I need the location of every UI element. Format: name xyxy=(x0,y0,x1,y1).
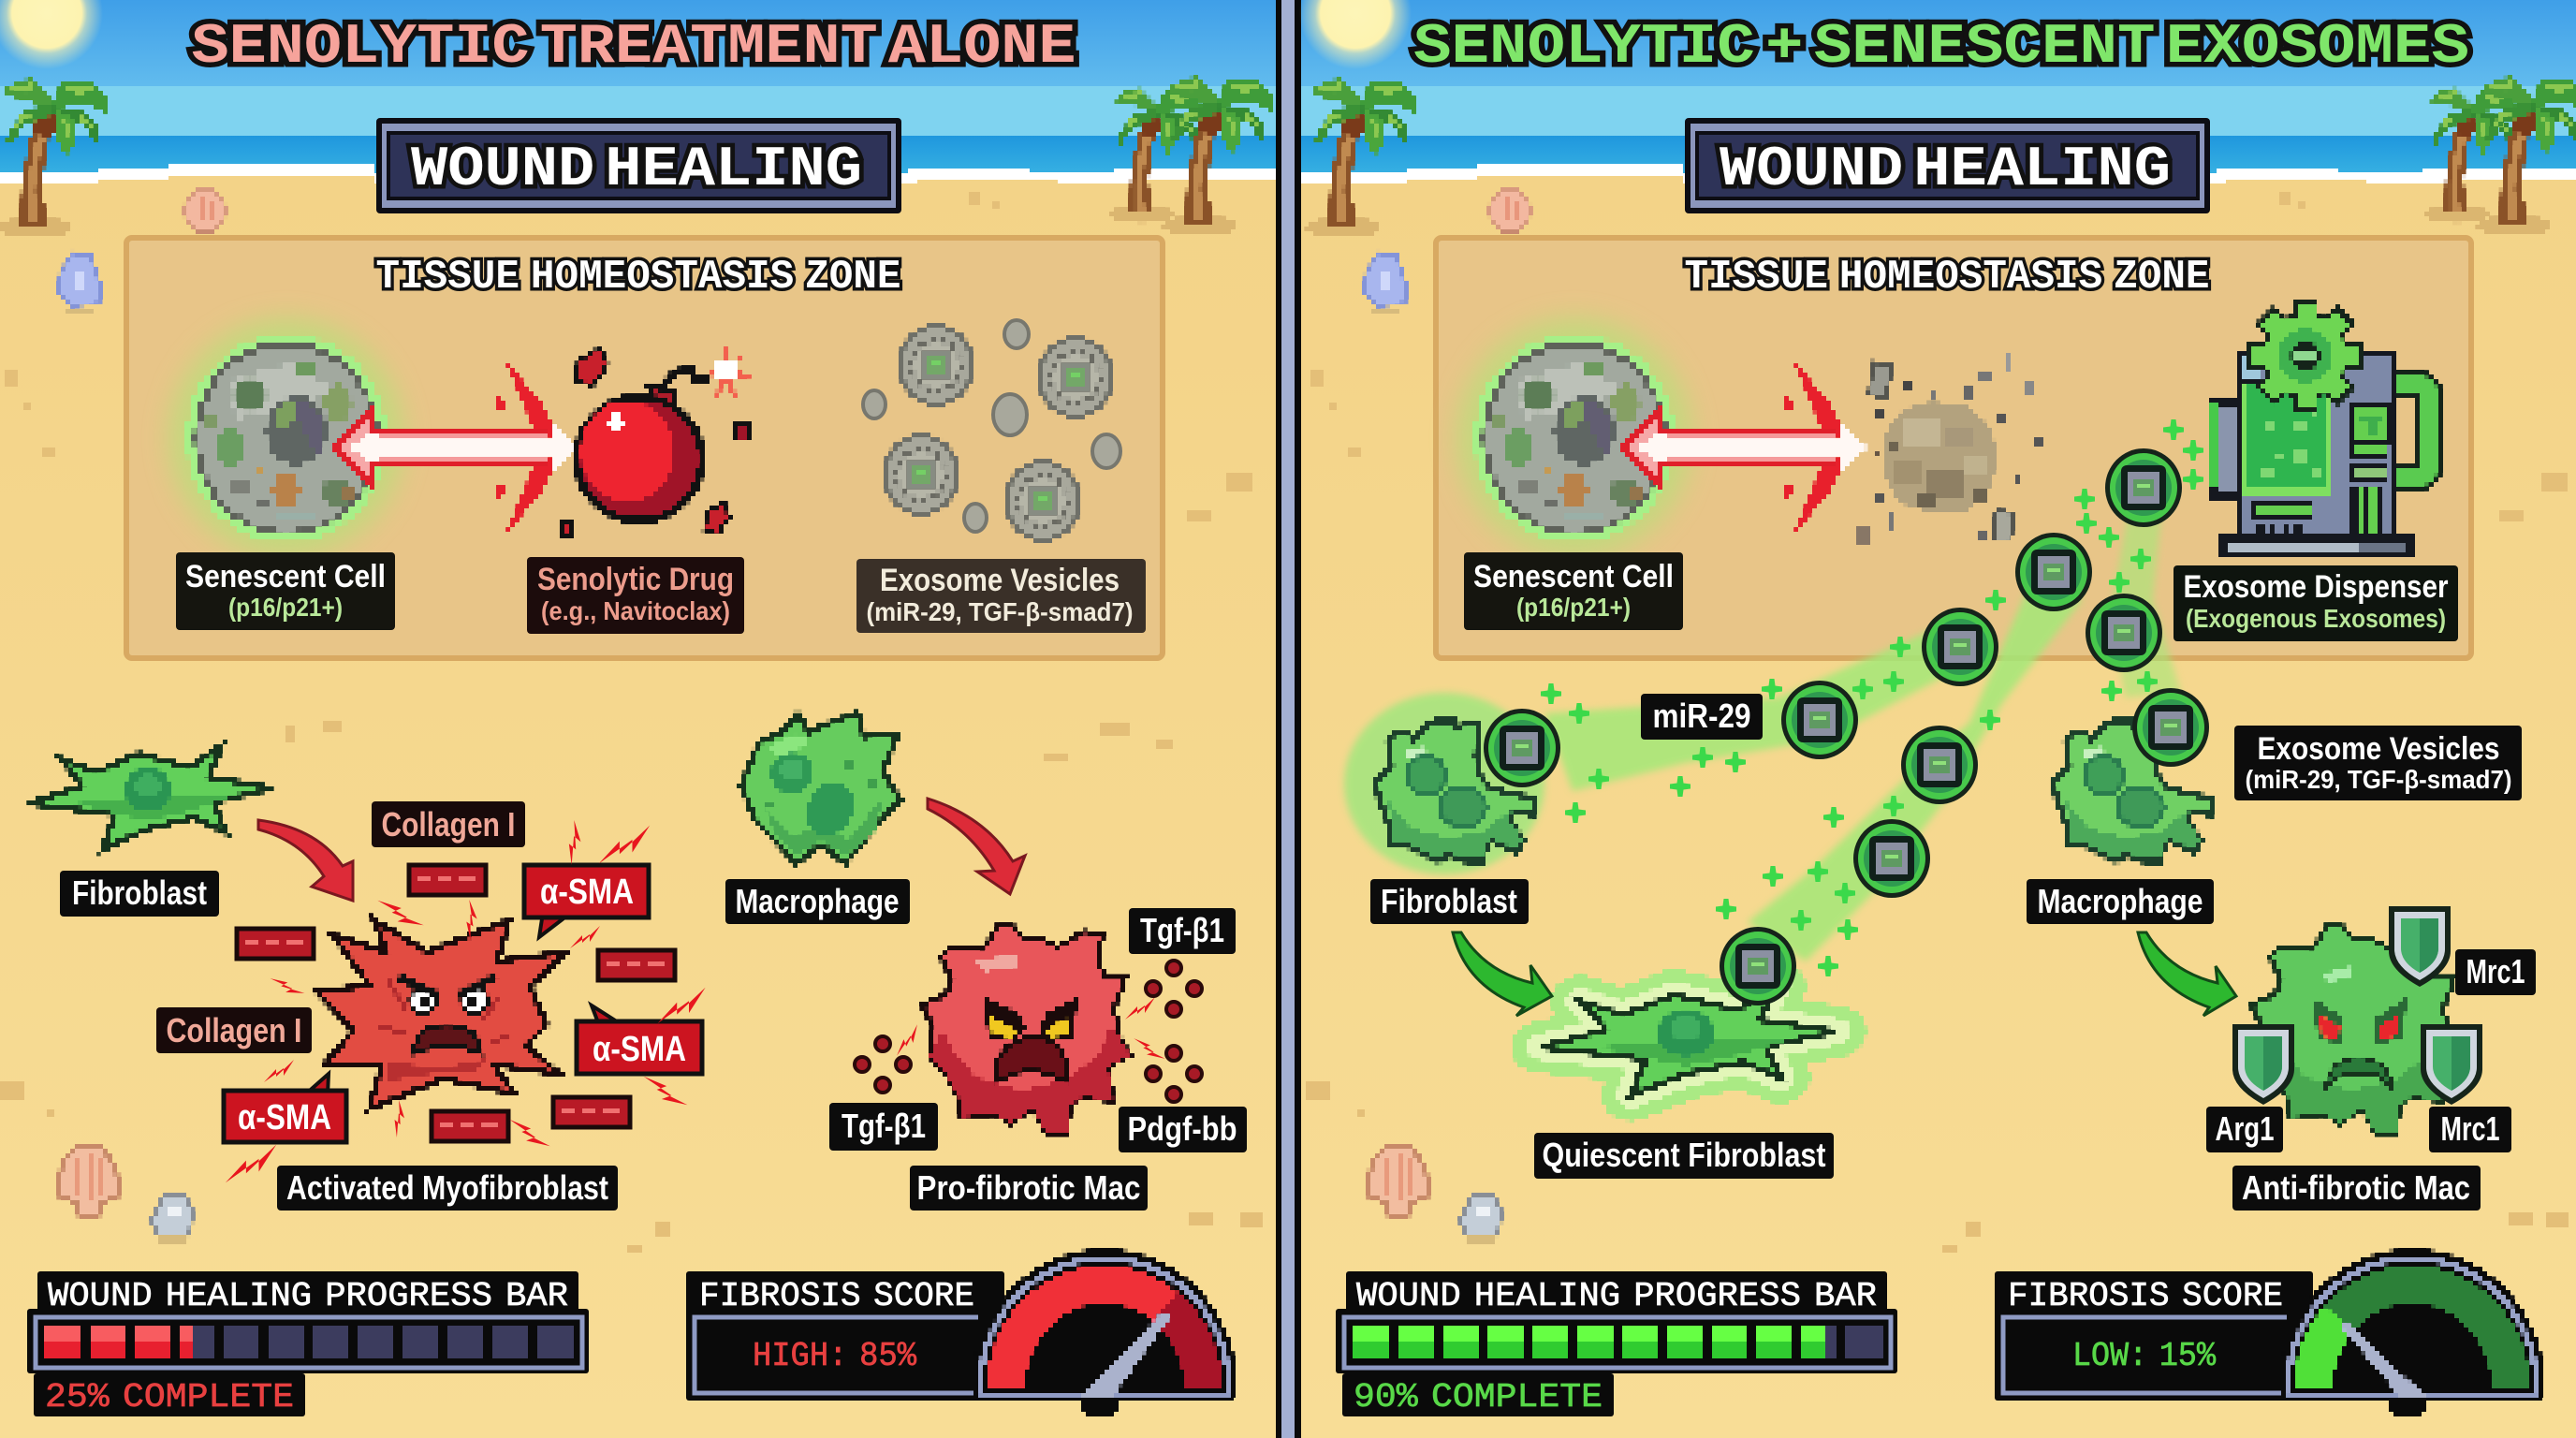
label: collagen I top: Collagen I xyxy=(382,805,515,844)
arrow: macrophage to anti-fibrotic mac xyxy=(2138,932,2236,1016)
gauge panel: fibrosis score low xyxy=(1995,1249,2545,1416)
sand specks xyxy=(0,192,1263,1253)
banner: wound healing: WOUND HEALING xyxy=(1720,139,2171,202)
icon: fibroblast xyxy=(29,745,271,849)
icon: shields xyxy=(2232,906,2482,1105)
label: Mrc1 top xyxy=(2455,949,2536,995)
icon: palm tree right large xyxy=(1163,76,1273,236)
arrow: red beam xyxy=(1618,360,1868,535)
label: exosome dispenser xyxy=(2174,565,2458,641)
background: beach scene right xyxy=(1299,0,2576,1438)
banner: wound healing: WOUND HEALING xyxy=(411,139,862,202)
icon: anti-fibrotic macrophage xyxy=(2251,925,2459,1133)
label: Mrc1 bottom xyxy=(2429,1107,2511,1152)
label: pro-fibrotic mac: Pro-fibrotic Mac xyxy=(917,1168,1140,1207)
label: activated myofibroblast: Activated Myofibroblast xyxy=(286,1168,608,1207)
arrow: fibroblast to myofibroblast xyxy=(258,820,353,901)
icon: large shell xyxy=(1367,1148,1430,1215)
title: SENOLYTIC + SENESCENT EXOSOMES xyxy=(1413,16,2469,80)
label: Mrc1 top: Mrc1 xyxy=(2466,952,2525,990)
stream: exosome trail to quiescent fibroblast xyxy=(1748,580,2083,961)
icon: pro-fibrotic macrophage xyxy=(922,925,1130,1133)
icon: senolytic bomb xyxy=(561,345,754,536)
label: Arg1: Arg1 xyxy=(2215,1109,2275,1148)
icon: green exosomes xyxy=(1484,448,2209,1005)
label: Tgf-beta1 top: Tgf-β1 xyxy=(1140,911,1224,949)
icon: palm tree left xyxy=(0,78,108,238)
progress bar: 90% xyxy=(1336,1271,1897,1416)
gauge heading: FIBROSIS SCORE xyxy=(699,1277,974,1315)
icon: macrophage xyxy=(741,713,900,863)
label: exosome vesicles: (miR-29, TGF-β-smad7) xyxy=(867,597,1133,626)
panel: senolytic plus senescent exosomes xyxy=(1299,0,2576,1438)
icon: palm tree right small xyxy=(1110,87,1204,223)
label: exosome dispenser: (Exogenous Exosomes) xyxy=(2186,604,2446,633)
label: senolytic drug: (e.g., Navitoclax) xyxy=(541,596,730,625)
arrow: fibroblast to quiescent fibroblast xyxy=(1453,932,1552,1016)
label: Tgf-beta1 left: Tgf-β1 xyxy=(842,1107,926,1145)
gauge dial xyxy=(2279,1249,2545,1416)
icon: blue shell xyxy=(1365,253,1408,315)
bar status: 90% COMPLETE xyxy=(1354,1378,1603,1416)
label: Mrc1 bottom: Mrc1 xyxy=(2441,1109,2499,1148)
icon: macrophage (treated) xyxy=(2054,721,2213,861)
label: exosome vesicles: Exosome Vesicles xyxy=(2258,731,2499,767)
arrow: red beam xyxy=(330,360,580,535)
panel: tissue homeostasis zone xyxy=(1436,238,2471,961)
stream: exosome trail to macrophage xyxy=(2111,506,2181,697)
icon: blue shell xyxy=(59,253,102,315)
icon: palm tree right small xyxy=(2425,87,2519,223)
icon: activated myofibroblast xyxy=(316,920,567,1108)
icon: large shell xyxy=(57,1148,121,1215)
banner: wound healing xyxy=(376,118,901,213)
senescent cell glow xyxy=(169,318,403,558)
sand specks xyxy=(1306,192,2569,1253)
icon: senescent cell xyxy=(1474,334,1675,542)
divider xyxy=(1276,0,1301,1438)
banner: wound healing xyxy=(1685,118,2210,213)
label: senescent cell: (p16/p21+) xyxy=(228,593,343,622)
gauge dial xyxy=(972,1249,1237,1416)
label: anti-fibrotic mac: Anti-fibrotic Mac xyxy=(2242,1168,2470,1207)
bar heading: WOUND HEALING PROGRESS BAR xyxy=(1356,1277,1877,1315)
arrow: macrophage to pro-fibrotic mac xyxy=(928,799,1025,894)
zone heading: TISSUE HOMEOSTASIS ZONE xyxy=(1685,254,2209,301)
icon: green sparkles xyxy=(1541,419,2203,976)
zone heading: TISSUE HOMEOSTASIS ZONE xyxy=(376,254,900,301)
label: exosome dispenser: Exosome Dispenser xyxy=(2183,569,2449,605)
callout: alpha-SMA right xyxy=(577,1005,702,1074)
label: senescent cell: Senescent Cell xyxy=(185,559,386,594)
label: exosome vesicles: Exosome Vesicles xyxy=(880,563,1120,598)
icon: pink shell xyxy=(185,189,225,235)
label: collagen I left: Collagen I xyxy=(167,1011,301,1049)
label: Tgf-beta1 left xyxy=(829,1103,938,1151)
icon: grey exosome vesicles xyxy=(863,320,1120,542)
icon: exosome dispenser xyxy=(2207,298,2430,558)
label: exosome vesicles: (miR-29, TGF-β-smad7) xyxy=(2245,765,2512,794)
icon: senescent cell xyxy=(186,334,387,542)
gauge panel: fibrosis score high xyxy=(686,1249,1237,1416)
background: beach scene left xyxy=(0,0,1277,1438)
panel: senolytic treatment alone xyxy=(0,0,1277,1438)
label: senolytic drug: Senolytic Drug xyxy=(537,562,734,597)
label: senescent cell: Senescent Cell xyxy=(1473,559,1674,594)
label: senescent cell: (p16/p21+) xyxy=(1516,593,1631,622)
bar heading: WOUND HEALING PROGRESS BAR xyxy=(48,1277,568,1315)
label: fibroblast: Fibroblast xyxy=(1381,882,1517,920)
icon: quiescent fibroblast xyxy=(1541,987,1837,1095)
label: senolytic drug xyxy=(527,557,744,634)
gauge heading: FIBROSIS SCORE xyxy=(2008,1277,2283,1315)
label: macrophage: Macrophage xyxy=(736,882,899,920)
callout: alpha-SMA right: α-SMA xyxy=(593,1030,686,1069)
label: exosome vesicles xyxy=(856,559,1146,633)
icon: pebble xyxy=(152,1194,193,1242)
icon: palm tree right large xyxy=(2477,76,2576,236)
icon: pebble xyxy=(1460,1194,1501,1242)
gauge value: LOW: 15% xyxy=(2072,1337,2216,1375)
icon: red sparks xyxy=(226,820,1165,1182)
label: Pdgf-bb: Pdgf-bb xyxy=(1127,1109,1237,1148)
label: senescent cell xyxy=(176,552,395,630)
icon: pink shell xyxy=(1490,189,1530,235)
senescent cell glow xyxy=(1457,318,1691,558)
bar status: 25% COMPLETE xyxy=(45,1378,294,1416)
icon: fibroblast (treated) xyxy=(1376,721,1535,861)
label: quiescent fibroblast: Quiescent Fibroblast xyxy=(1543,1136,1825,1174)
label: macrophage: Macrophage xyxy=(2037,882,2203,920)
icon: destroyed drug rubble xyxy=(1856,353,2045,547)
callout: alpha-SMA left: α-SMA xyxy=(238,1098,331,1137)
icon: fibroblast glow xyxy=(1344,693,1544,874)
callout: alpha-SMA top: α-SMA xyxy=(540,873,634,912)
gauge value: HIGH: 85% xyxy=(753,1337,916,1375)
icon: collagen fibres xyxy=(237,865,675,1141)
label: exosome vesicles xyxy=(2234,726,2522,800)
callout: alpha-SMA top xyxy=(524,865,649,937)
progress bar: 25% xyxy=(27,1271,589,1416)
icon: palm tree left xyxy=(1306,78,1416,238)
stream: exosome trail to fibroblast xyxy=(1544,627,1975,791)
title: SENOLYTIC TREATMENT ALONE xyxy=(191,16,1076,80)
label: fibroblast: Fibroblast xyxy=(72,873,207,912)
label: senescent cell xyxy=(1464,552,1683,630)
icon: cytokine dots xyxy=(855,961,1202,1102)
label: miR-29: miR-29 xyxy=(1653,697,1750,735)
callout: alpha-SMA left xyxy=(224,1074,346,1142)
panel: tissue homeostasis zone xyxy=(126,238,1163,658)
label: Arg1 xyxy=(2206,1107,2283,1152)
